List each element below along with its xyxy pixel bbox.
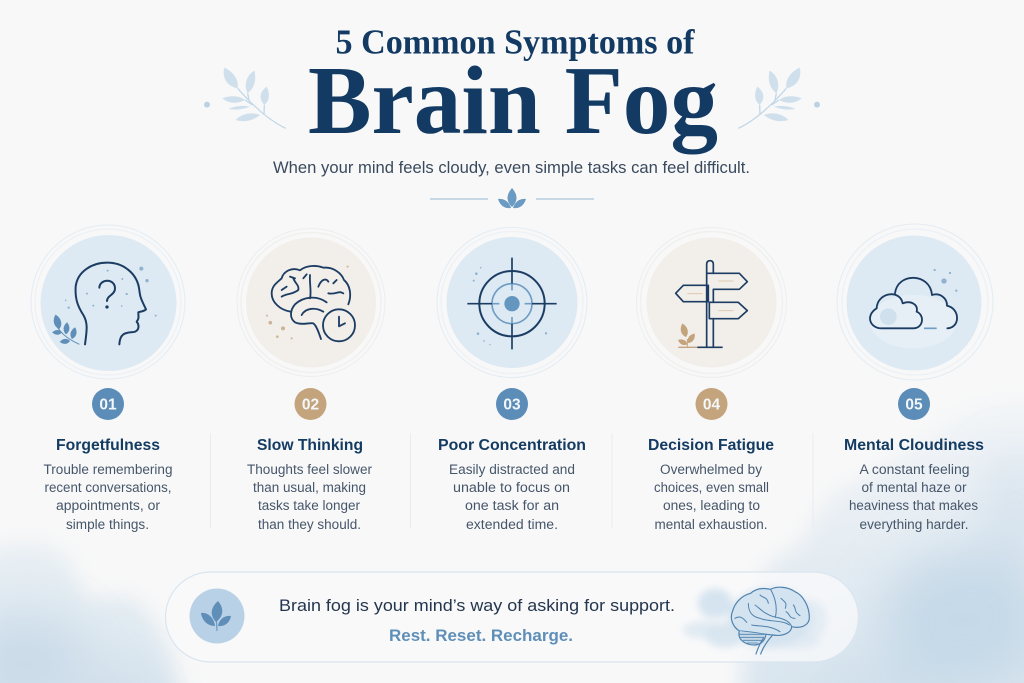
description: recent conversations,	[44, 480, 172, 495]
icon: leaf circle	[190, 588, 244, 644]
panel: 03 poor concentration	[437, 228, 587, 532]
panel: 05 mental cloudiness	[837, 224, 993, 532]
heading: Mental Cloudiness	[844, 437, 984, 454]
heading: Decision Fatigue	[648, 437, 774, 454]
number badge 03	[496, 388, 528, 420]
description: tasks take longer	[258, 498, 360, 513]
description: Easily distracted and	[449, 462, 575, 477]
description: of mental haze or	[862, 480, 967, 495]
number badge 05: 05	[905, 396, 923, 414]
callout message: Brain fog is your mind’s way of asking for support.	[279, 596, 675, 615]
description	[449, 462, 575, 532]
callout banner	[166, 572, 858, 662]
description: choices, even small	[654, 480, 769, 495]
right laurel sprig	[738, 68, 820, 128]
heading: Slow Thinking	[257, 437, 363, 454]
icon: brain with clock	[237, 228, 385, 376]
title line two: Brain Fog	[308, 47, 718, 155]
description: simple things.	[66, 517, 149, 532]
header	[204, 22, 820, 208]
panel: 04 decision fatigue	[636, 228, 786, 532]
description: Thoughts feel slower	[247, 462, 372, 477]
description: Trouble remembering	[44, 462, 172, 477]
description: Overwhelmed by	[660, 462, 762, 477]
description: appointments, or	[56, 498, 161, 513]
subtitle: When your mind feels cloudy, even simple tasks can feel difficult.	[273, 158, 750, 177]
number badge 04: 04	[703, 396, 720, 414]
description	[247, 462, 372, 532]
number badge 05	[898, 388, 930, 420]
background fog: bottom right	[740, 401, 1024, 683]
left laurel sprig	[204, 68, 286, 128]
number badge 01	[92, 388, 124, 420]
icon: head with question mark	[31, 225, 185, 379]
description: mental exhaustion.	[654, 517, 768, 532]
description	[44, 462, 172, 532]
number badge 01: 01	[99, 396, 117, 414]
description: extended time.	[466, 517, 558, 532]
description: everything harder.	[860, 517, 968, 532]
description: heaviness that makes	[849, 498, 978, 513]
heading: Poor Concentration	[438, 437, 586, 454]
icon: clouds	[837, 224, 993, 380]
panel: 01 forgetfulness	[31, 225, 185, 532]
description: unable to focus on	[453, 480, 570, 495]
number badge 02	[294, 388, 326, 420]
description: ones, leading to	[663, 498, 760, 513]
icon: signpost	[636, 228, 786, 378]
number badge 04	[696, 388, 728, 420]
background fog: bottom left	[0, 543, 185, 683]
icon: target crosshair	[437, 228, 587, 378]
title line one: 5 Common Symptoms of	[336, 22, 695, 62]
number badge 02: 02	[302, 396, 319, 414]
number badge 03: 03	[503, 396, 521, 414]
description: than usual, making	[253, 480, 366, 495]
description	[849, 462, 978, 532]
divider with leaf ornament	[430, 188, 594, 208]
callout tagline: Rest. Reset. Recharge.	[389, 626, 573, 645]
description	[654, 462, 769, 532]
description: than they should.	[258, 517, 361, 532]
panel: 02 slow thinking	[237, 228, 385, 532]
description: one task for an	[465, 498, 559, 513]
description: A constant feeling	[860, 462, 970, 477]
heading: Forgetfulness	[56, 437, 160, 454]
illustration: brain over watercolor	[683, 587, 827, 654]
